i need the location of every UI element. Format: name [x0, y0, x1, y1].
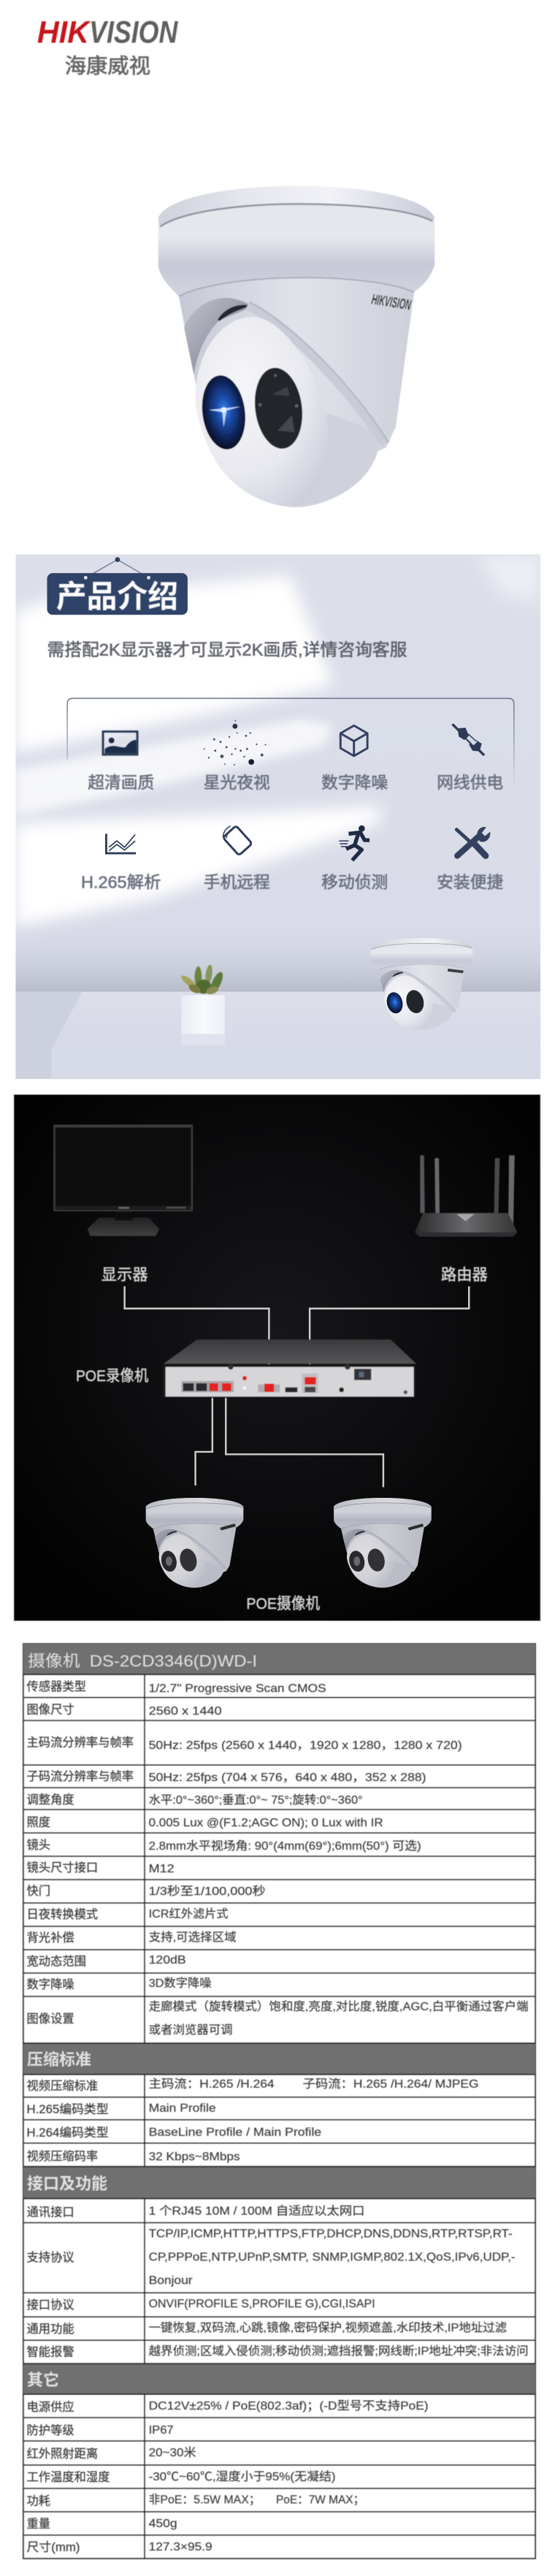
product camera	[158, 186, 435, 507]
icon: phone	[223, 826, 252, 856]
table values: 走廊模式（旋转模式）饱和度,亮度,对比度,锐度,AGC,白平衡通过客户端	[149, 2000, 529, 2013]
heading badge	[47, 557, 188, 615]
table labels: 防护等级	[26, 2424, 74, 2437]
panel: connection diagram	[13, 1094, 540, 1621]
table values: 3D数字降噪	[149, 1977, 212, 1990]
table labels: 通用功能	[26, 2323, 74, 2336]
feature: 网线供电	[437, 724, 503, 792]
hero: logo and product camera	[37, 15, 435, 508]
connection lines	[125, 1286, 469, 1487]
camera left	[146, 1498, 243, 1588]
table values: 20~30米	[149, 2446, 196, 2459]
panel: product introduction	[15, 555, 540, 1079]
plant	[180, 964, 225, 1045]
icon: stars	[204, 720, 266, 766]
icon: cube	[340, 726, 367, 756]
feature: 超清画质	[88, 731, 154, 792]
table labels: 支持协议	[26, 2251, 74, 2264]
table labels: 调整角度	[26, 1793, 74, 1807]
table labels: H.264编码类型	[26, 2126, 108, 2139]
table labels: 重量	[26, 2518, 50, 2531]
table labels: 主码流分辨率与帧率	[26, 1736, 134, 1749]
table values: 0.005 Lux @(F1.2;AGC ON); 0 Lux with IR	[149, 1817, 383, 1829]
feature frame	[67, 699, 514, 788]
table labels: 镜头	[26, 1838, 50, 1852]
table values: 2560 x 1440	[149, 1705, 222, 1718]
table labels: 照度	[26, 1816, 50, 1829]
table values: M12	[149, 1863, 175, 1875]
table values: 50Hz: 25fps (704 x 576，640 x 480，352 x 288)	[149, 1772, 426, 1784]
table labels: 背光补偿	[26, 1931, 74, 1945]
table values: -30℃~60℃,湿度小于95%(无凝结)	[149, 2470, 336, 2483]
icon: picture	[103, 731, 137, 755]
feature: 星光夜视: 星光夜视	[204, 773, 270, 792]
table values: 主码流：H.265 /H.264	[149, 2077, 275, 2091]
table values: ONVIF(PROFILE S,PROFILE G),CGI,ISAPI	[149, 2298, 375, 2310]
label: 显示器: 显示器	[102, 1266, 148, 1283]
table values: 32 Kbps~8Mbps	[149, 2150, 240, 2164]
feature: 移动侦测	[321, 826, 388, 891]
table values: TCP/IP,ICMP,HTTP,HTTPS,FTP,DHCP,DNS,DDNS,RTP,RTSP,RT-	[149, 2228, 513, 2240]
feature: 数字降噪	[321, 726, 388, 792]
feature: 网线供电: 网线供电	[437, 773, 503, 792]
small camera	[370, 938, 472, 1030]
label: POE录像机: POE录像机	[76, 1367, 148, 1385]
POE cameras	[146, 1498, 432, 1588]
feature: 数字降噪: 数字降噪	[321, 773, 388, 792]
table labels: 接口协议	[26, 2299, 74, 2312]
table values: ICR红外滤片式	[149, 1907, 229, 1921]
table labels: 视频压缩标准	[26, 2080, 98, 2093]
logo	[37, 15, 178, 78]
table values: 非PoE：5.5W MAX；	[149, 2494, 261, 2507]
table grid	[23, 1644, 535, 2558]
table headers: 其它	[27, 2371, 59, 2389]
heading badge: 产品介绍	[56, 580, 178, 615]
table labels: 红外照射距离	[26, 2448, 98, 2461]
feature: 超清画质: 超清画质	[88, 773, 154, 792]
table labels: 电源供应	[26, 2400, 74, 2414]
table labels: 智能报警	[26, 2346, 74, 2359]
table labels: 子码流分辨率与帧率	[26, 1770, 134, 1783]
table labels: 工作温度和湿度	[26, 2471, 110, 2484]
feature: 移动侦测: 移动侦测	[321, 872, 388, 891]
table labels: 视频压缩码率	[26, 2150, 98, 2164]
feature: 手机远程	[204, 826, 270, 891]
table values: IP67	[149, 2424, 174, 2437]
logo: 海康威视	[65, 55, 150, 78]
table headers: 摄像机 DS-2CD3346(D)WD-I	[28, 1652, 257, 1670]
router	[415, 1156, 518, 1237]
table labels: H.265编码类型	[26, 2103, 108, 2116]
table values: 120dB	[149, 1954, 186, 1966]
table values: Bonjour	[149, 2275, 193, 2287]
feature: H.265解析: H.265解析	[81, 872, 161, 891]
icon: line chart	[106, 834, 136, 853]
table values: 1 个RJ45 10M / 100M 自适应以太网口	[149, 2204, 365, 2218]
icon: runner	[339, 826, 370, 861]
table values: PoE：7W MAX；	[276, 2494, 364, 2507]
feature: 星光夜视	[204, 720, 270, 792]
table values: 2.8mm水平视场角: 90°(4mm(69°);6mm(50°) 可选)	[149, 1839, 421, 1853]
table values: 越界侦测;区域入侵侦测;移动侦测;遮挡报警;网线断;IP地址冲突;非法访问	[149, 2345, 529, 2358]
table headers: 接口及功能	[27, 2175, 107, 2193]
spec table	[22, 1642, 537, 2560]
table labels: 通讯接口	[26, 2206, 74, 2219]
icon: plug	[452, 724, 484, 756]
table labels: 图像设置	[26, 2012, 74, 2026]
table	[15, 991, 540, 1079]
POE recorder	[162, 1339, 416, 1398]
table values: 450g	[149, 2518, 177, 2530]
table headers	[27, 1652, 257, 2389]
table values: 子码流：H.265 /H.264/ MJPEG	[302, 2077, 479, 2091]
table labels: 镜头尺寸接口	[26, 1861, 98, 1875]
table values: 1/3秒至1/100,000秒	[149, 1885, 266, 1898]
table values: 127.3×95.9	[149, 2541, 213, 2553]
table labels: 尺寸(mm)	[26, 2541, 80, 2554]
table values: DC12V±25% / PoE(802.3af)；(-D型号不支持PoE)	[149, 2399, 429, 2412]
table labels: 传感器类型	[26, 1680, 86, 1693]
table values: 1/2.7" Progressive Scan CMOS	[149, 1683, 326, 1695]
logo: HIK	[37, 15, 91, 50]
table labels: 日夜转换模式	[26, 1908, 98, 1921]
camera right	[334, 1498, 432, 1588]
table values: 或者浏览器可调	[149, 2023, 233, 2037]
label: POE摄像机: POE摄像机	[246, 1595, 320, 1612]
table labels: 快门	[26, 1885, 50, 1898]
table labels: 数字降噪	[26, 1978, 74, 1991]
table labels	[26, 1680, 134, 2554]
icon: tools	[456, 827, 490, 857]
feature: 安装便捷: 安装便捷	[437, 872, 503, 891]
table values: BaseLine Profile / Main Profile	[149, 2126, 321, 2139]
table values: 水平:0°~360°;垂直:0°~ 75°;旋转:0°~360°	[149, 1793, 363, 1807]
intro text: 需搭配2K显示器才可显示2K画质,详情咨询客服	[47, 640, 407, 659]
background and light beams	[15, 554, 540, 1079]
table headers: 压缩标准	[27, 2050, 91, 2069]
table values	[149, 1683, 529, 2553]
label: 路由器: 路由器	[441, 1266, 488, 1283]
table values: 50Hz: 25fps (2560 x 1440，1920 x 1280，1280 x 720)	[149, 1739, 462, 1752]
monitor	[53, 1125, 193, 1236]
product camera: HIKVISION	[370, 292, 413, 313]
table labels: 功耗	[26, 2495, 50, 2508]
feature: 手机远程: 手机远程	[204, 872, 270, 891]
feature: H.265解析	[81, 834, 161, 891]
table labels: 图像尺寸	[26, 1704, 74, 1717]
logo: VISION	[89, 15, 178, 50]
table values: 支持,可选择区域	[149, 1931, 237, 1944]
table values: Main Profile	[149, 2102, 216, 2115]
table values: CP,PPPoE,NTP,UPnP,SMTP, SNMP,IGMP,802.1X,QoS,IPv6,UDP,-	[149, 2251, 516, 2264]
feature: 安装便捷	[437, 827, 503, 891]
table labels: 宽动态范围	[26, 1955, 86, 1968]
table values: 一键恢复,双码流,心跳,镜像,密码保护,视频遮盖,水印技术,IP地址过滤	[149, 2321, 507, 2334]
